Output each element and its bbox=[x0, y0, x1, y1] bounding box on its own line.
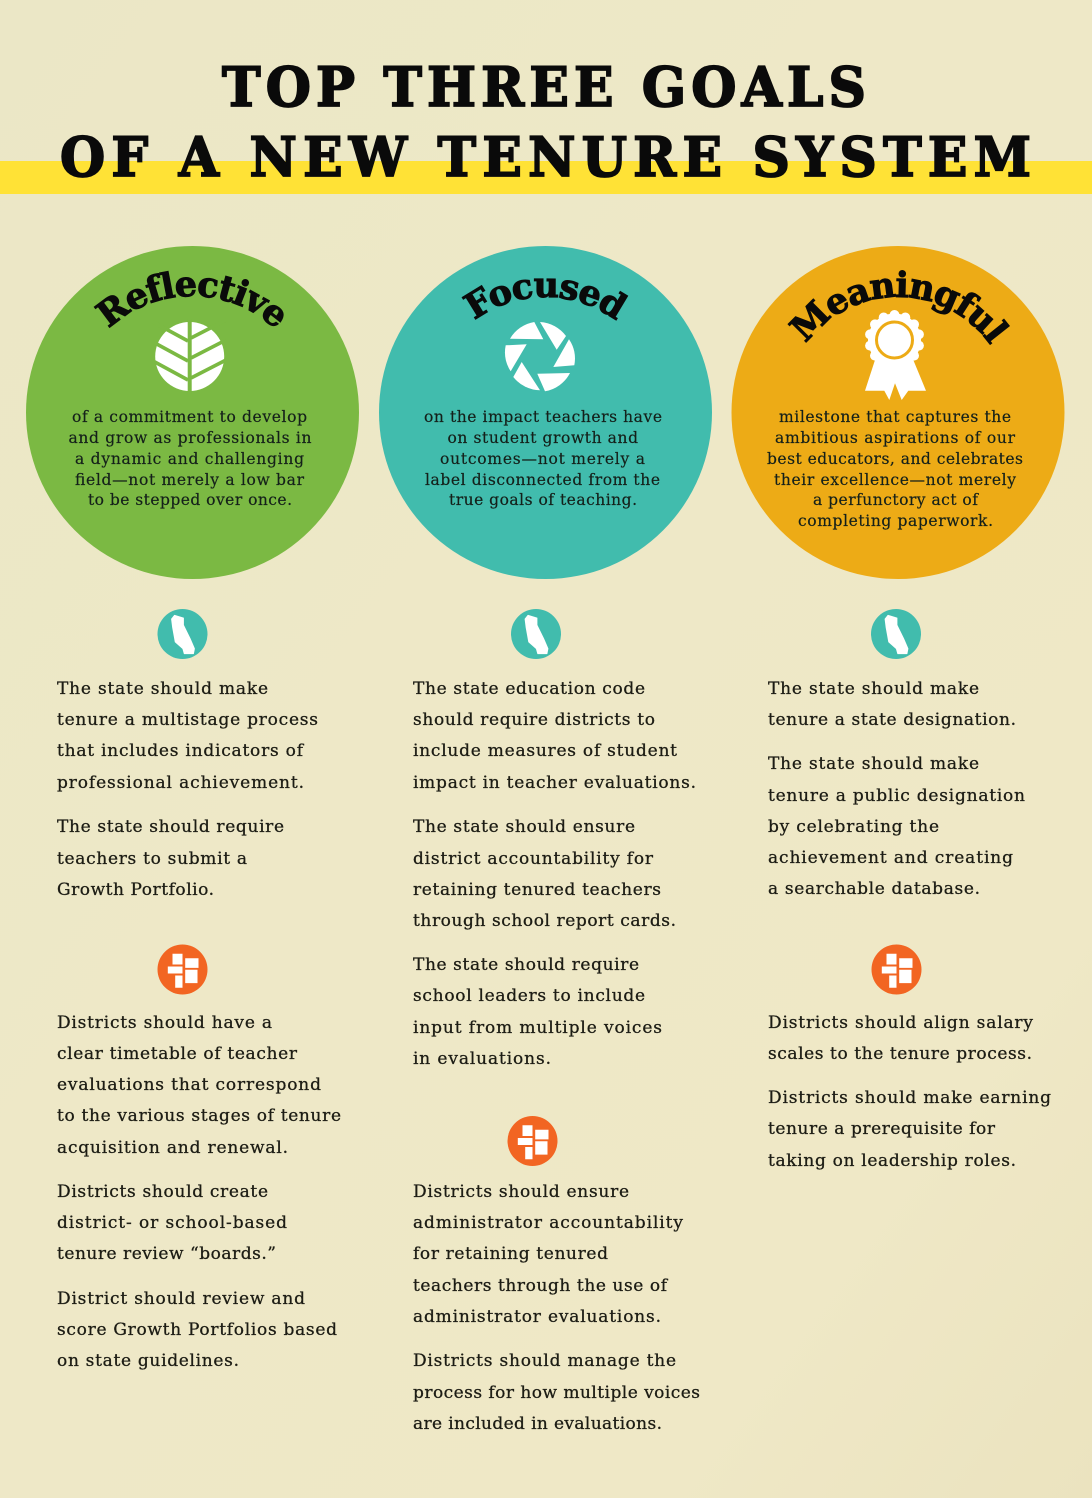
text: column 1 district recommendations: tenure review “boards.” bbox=[57, 1244, 276, 1264]
text: column 1 district recommendations: on state guidelines. bbox=[57, 1351, 239, 1371]
text: column 1 district recommendations: District should review and bbox=[57, 1289, 305, 1309]
text: column 1 district recommendations bbox=[57, 1013, 341, 1371]
description: Meaningful bbox=[767, 408, 1023, 530]
description: Meaningful: a perfunctory act of bbox=[813, 491, 979, 509]
heading: Reflective: Reflective bbox=[94, 270, 284, 328]
icon: California state, column 2 bbox=[511, 609, 561, 659]
icon: district, column 1 bbox=[158, 944, 208, 994]
text: column 2 district recommendations: teachers through the use of bbox=[413, 1276, 669, 1296]
text: column 3 district recommendations: taking on leadership roles. bbox=[768, 1151, 1016, 1171]
text: column 2 state recommendations: district accountability for bbox=[413, 849, 654, 869]
description: Meaningful: ambitious aspirations of our bbox=[775, 429, 1016, 447]
text: column 2 state recommendations: should require districts to bbox=[413, 710, 655, 730]
text: column 2 state recommendations: school leaders to include bbox=[413, 986, 645, 1006]
heading: Meaningful: Meaningful bbox=[788, 270, 1010, 346]
description: Reflective bbox=[68, 408, 312, 509]
text: column 2 state recommendations: The state should require bbox=[413, 955, 639, 975]
text: column 2 state recommendations: input from multiple voices bbox=[413, 1018, 662, 1038]
text: column 1 state recommendations: that includes indicators of bbox=[57, 741, 305, 761]
text: column 1 district recommendations: acquisition and renewal. bbox=[57, 1138, 288, 1158]
text: column 2 state recommendations: include measures of student bbox=[413, 741, 677, 761]
text: column 3 state recommendations bbox=[768, 679, 1025, 899]
text: column 2 state recommendations: through school report cards. bbox=[413, 911, 676, 931]
icon: California state, column 1 bbox=[158, 609, 208, 659]
text: column 3 state recommendations: by celebrating the bbox=[768, 817, 939, 837]
description: Reflective: a dynamic and challenging bbox=[75, 450, 304, 468]
description: Focused: on the impact teachers have bbox=[424, 408, 662, 426]
description: Focused: label disconnected from the bbox=[425, 471, 660, 489]
text: column 3 state recommendations: achievement and creating bbox=[768, 848, 1013, 868]
title: TOP THREE GOALS bbox=[222, 56, 866, 119]
description: Meaningful: their excellence—not merely bbox=[774, 471, 1016, 489]
text: column 3 state recommendations: tenure a public designation bbox=[768, 786, 1025, 806]
description: Meaningful: best educators, and celebrates bbox=[767, 450, 1023, 468]
text: column 1 district recommendations: Districts should create bbox=[57, 1182, 268, 1202]
text: column 3 district recommendations bbox=[768, 1013, 1051, 1171]
text: column 1 state recommendations: teachers to submit a bbox=[57, 849, 247, 869]
description: Focused: true goals of teaching. bbox=[449, 491, 637, 509]
text: column 3 district recommendations: Districts should align salary bbox=[768, 1013, 1033, 1033]
description: Meaningful: completing paperwork. bbox=[798, 512, 993, 530]
description: Reflective: to be stepped over once. bbox=[88, 491, 292, 509]
icon: district, column 3 bbox=[872, 944, 922, 994]
text: column 3 state recommendations: The state should make bbox=[768, 754, 979, 774]
text: column 3 state recommendations: The state should make bbox=[768, 679, 979, 699]
description: Focused: on student growth and bbox=[448, 429, 638, 447]
text: column 2 district recommendations: Districts should manage the bbox=[413, 1351, 676, 1371]
text: column 3 state recommendations: a searchable database. bbox=[768, 879, 980, 899]
icon: California state, column 3 bbox=[871, 609, 921, 659]
panel: Reflective circle bbox=[26, 246, 359, 579]
text: column 1 state recommendations: Growth Portfolio. bbox=[57, 880, 214, 900]
text: column 2 district recommendations: are included in evaluations. bbox=[413, 1414, 662, 1434]
description: Reflective: of a commitment to develop bbox=[72, 408, 307, 426]
description: Meaningful: milestone that captures the bbox=[779, 408, 1011, 426]
text: column 2 district recommendations: Districts should ensure bbox=[413, 1182, 629, 1202]
description: Focused: outcomes—not merely a bbox=[440, 450, 645, 468]
title bbox=[60, 56, 1031, 189]
text: column 2 state recommendations: in evaluations. bbox=[413, 1049, 551, 1069]
description: Reflective: field—not merely a low bar bbox=[75, 471, 305, 489]
text: column 1 district recommendations: score Growth Portfolios based bbox=[57, 1320, 337, 1340]
text: column 2 state recommendations: The state should ensure bbox=[413, 817, 635, 837]
text: column 1 state recommendations: professional achievement. bbox=[57, 773, 304, 793]
text: column 3 district recommendations: Districts should make earning bbox=[768, 1088, 1051, 1108]
icon: district, column 2 bbox=[508, 1116, 558, 1166]
text: column 2 state recommendations: retaining tenured teachers bbox=[413, 880, 661, 900]
text: column 3 state recommendations: tenure a state designation. bbox=[768, 710, 1016, 730]
text: column 3 district recommendations: tenure a prerequisite for bbox=[768, 1119, 996, 1139]
text: column 2 district recommendations: process for how multiple voices bbox=[413, 1383, 700, 1403]
heading: Focused: Focused bbox=[462, 278, 628, 321]
title: OF A NEW TENURE SYSTEM bbox=[60, 126, 1031, 189]
text: column 1 district recommendations: district- or school-based bbox=[57, 1213, 287, 1233]
description: Reflective: and grow as professionals in bbox=[68, 429, 312, 447]
text: column 3 district recommendations: scales to the tenure process. bbox=[768, 1044, 1032, 1064]
icon: leaf bbox=[153, 319, 226, 394]
text: column 1 district recommendations: evaluations that correspond bbox=[57, 1075, 321, 1095]
panel: Focused circle bbox=[379, 246, 712, 579]
text: column 1 state recommendations: The state should make bbox=[57, 679, 268, 699]
text: column 2 district recommendations: administrator evaluations. bbox=[413, 1307, 661, 1327]
text: column 2 state recommendations: The state education code bbox=[413, 679, 645, 699]
yellow title band bbox=[0, 161, 1092, 194]
text: column 1 state recommendations bbox=[57, 679, 318, 900]
description: Focused bbox=[424, 408, 662, 509]
text: column 2 district recommendations: for retaining tenured bbox=[413, 1244, 608, 1264]
text: column 1 state recommendations: The state should require bbox=[57, 817, 284, 837]
text: column 1 district recommendations: Districts should have a bbox=[57, 1013, 272, 1033]
text: column 1 district recommendations: to the various stages of tenure bbox=[57, 1106, 341, 1126]
icon: award ribbon bbox=[865, 310, 926, 400]
text: column 1 state recommendations: tenure a multistage process bbox=[57, 710, 318, 730]
icon: aperture bbox=[505, 322, 575, 391]
text: column 2 state recommendations: impact in teacher evaluations. bbox=[413, 773, 696, 793]
panel: Meaningful circle bbox=[732, 246, 1064, 579]
text: column 2 district recommendations bbox=[413, 1182, 700, 1434]
text: column 1 district recommendations: clear timetable of teacher bbox=[57, 1044, 298, 1064]
text: column 2 district recommendations: administrator accountability bbox=[413, 1213, 683, 1233]
text: column 2 state recommendations bbox=[413, 679, 696, 1069]
